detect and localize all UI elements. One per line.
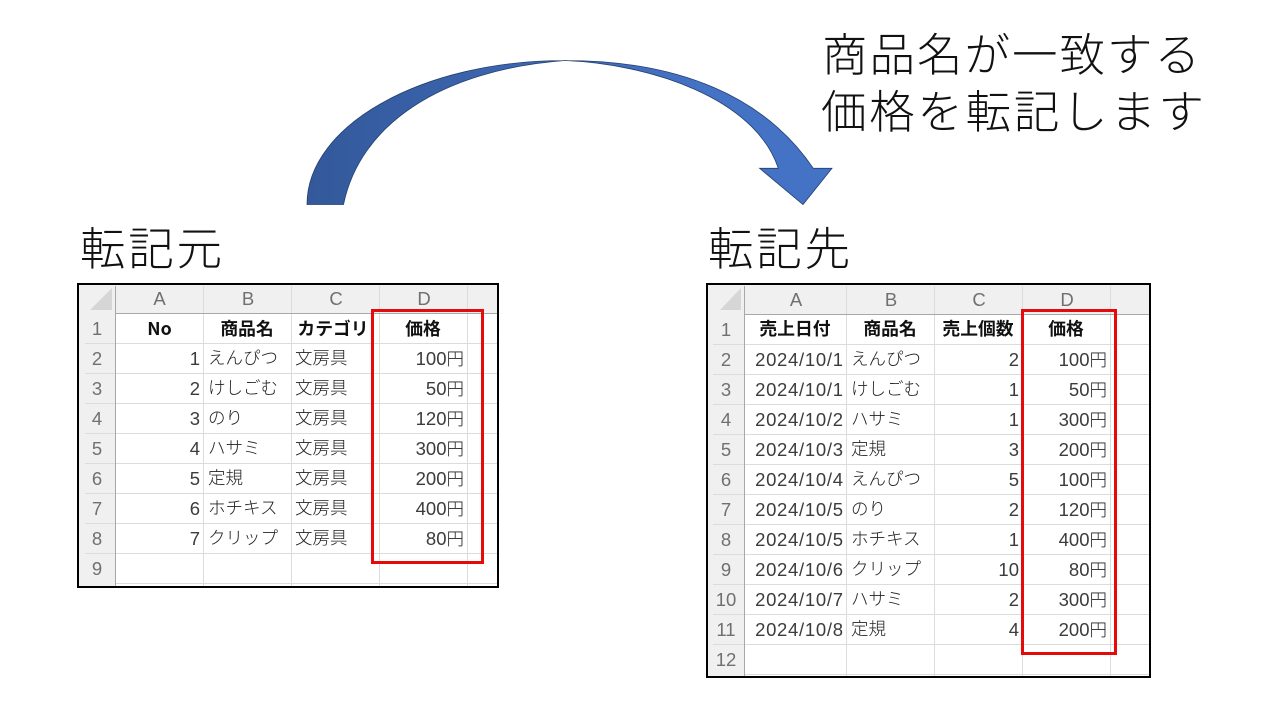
- heading: destination table: 転記先: [708, 213, 850, 279]
- panel: destination spreadsheet: [707, 284, 1150, 677]
- data: sale dates: 2024/10/6: [755, 559, 844, 580]
- heading: source table: 転記元: [80, 213, 222, 279]
- callout heading: 商品名が一致する: [822, 19, 1200, 85]
- data: sale dates: 2024/10/8: [755, 619, 844, 640]
- data: sale dates: 2024/10/1: [755, 379, 844, 400]
- data: prices: 120円: [1059, 497, 1107, 522]
- header row: 商品名: [863, 315, 917, 341]
- data: product names: ホチキス: [208, 495, 277, 520]
- row numbers: 5: [92, 438, 102, 459]
- header row: 価格: [405, 315, 441, 341]
- data: prices: 100円: [1059, 347, 1107, 372]
- data: categories: 文房具: [295, 375, 348, 400]
- row numbers: 9: [721, 559, 731, 580]
- data: product names: けしごむ: [208, 375, 278, 400]
- highlight: price column: [372, 310, 482, 562]
- data: sale dates: 2024/10/7: [755, 589, 844, 610]
- header row: 商品名: [220, 315, 274, 341]
- data: quantities: 1: [1009, 529, 1019, 550]
- data: quantities: 1: [1009, 409, 1019, 430]
- data: quantities: 1: [1009, 379, 1019, 400]
- data: No column: 2: [190, 378, 200, 399]
- data: No column: 6: [190, 498, 200, 519]
- data: prices: 200円: [1059, 617, 1107, 642]
- data: No column: 7: [190, 528, 200, 549]
- row numbers: 12: [716, 649, 736, 670]
- row numbers: 11: [716, 619, 736, 640]
- data: No column: 4: [190, 438, 200, 459]
- callout heading: 価格を転記します: [821, 76, 1204, 142]
- data: sale dates: [755, 349, 844, 640]
- data: quantities: 2: [1009, 349, 1019, 370]
- row numbers: 2: [92, 348, 102, 369]
- data: quantities: 4: [1009, 619, 1019, 640]
- column letters: B: [885, 289, 897, 310]
- header row: No: [147, 315, 172, 341]
- row numbers: 2: [721, 349, 731, 370]
- row numbers: 8: [721, 529, 731, 550]
- data: product names: 定規: [851, 436, 886, 461]
- header row: [147, 315, 441, 341]
- row numbers: 3: [92, 378, 102, 399]
- data: quantities: 10: [998, 559, 1019, 580]
- data: sale dates: 2024/10/5: [755, 499, 844, 520]
- data: prices: [1059, 347, 1107, 642]
- column letters: D: [1060, 289, 1074, 310]
- data: categories: 文房具: [295, 465, 348, 490]
- row numbers: [716, 319, 736, 670]
- data: No column: 5: [190, 468, 200, 489]
- data: product names: クリップ: [851, 556, 921, 581]
- row numbers: 10: [716, 589, 736, 610]
- arrow: curved from source table to destination table: [307, 60, 832, 204]
- data: product names: 定規: [208, 465, 243, 490]
- data: categories: [295, 345, 348, 550]
- data: prices: 80円: [1069, 557, 1107, 582]
- data: product names: ハサミ: [851, 406, 904, 431]
- data: categories: 文房具: [295, 525, 348, 550]
- data: prices: 200円: [1059, 437, 1107, 462]
- data: No column: [190, 348, 200, 549]
- data: product names: けしごむ: [851, 376, 921, 401]
- row numbers: 3: [721, 379, 731, 400]
- data: quantities: 2: [1009, 499, 1019, 520]
- data: quantities: [998, 349, 1019, 640]
- data: product names: ハサミ: [208, 435, 260, 460]
- data: product names: のり: [851, 496, 886, 521]
- header row: 売上個数: [942, 315, 1014, 341]
- data: categories: 文房具: [295, 405, 348, 430]
- data: product names: [851, 346, 921, 641]
- panel: source spreadsheet: [78, 284, 498, 587]
- data: sale dates: 2024/10/3: [755, 439, 844, 460]
- row numbers: 9: [92, 558, 102, 579]
- data: product names: えんぴつ: [851, 466, 921, 491]
- data: product names: ハサミ: [851, 586, 904, 611]
- row numbers: 6: [721, 469, 731, 490]
- data: prices: 50円: [1069, 377, 1107, 402]
- data: product names: えんぴつ: [208, 345, 278, 370]
- row numbers: 4: [721, 409, 731, 430]
- data: quantities: 3: [1009, 439, 1019, 460]
- data: No column: 3: [190, 408, 200, 429]
- data: product names: 定規: [851, 616, 886, 641]
- header row: 価格: [1048, 315, 1084, 341]
- data: categories: 文房具: [295, 345, 348, 370]
- data: No column: 1: [190, 348, 200, 369]
- column letters: C: [972, 289, 986, 310]
- data: sale dates: 2024/10/1: [755, 349, 844, 370]
- row numbers: 1: [92, 318, 102, 339]
- data: prices: [416, 346, 464, 551]
- callout heading: [821, 19, 1204, 142]
- data: categories: 文房具: [295, 495, 348, 520]
- column letters: [153, 288, 431, 309]
- data: prices: 50円: [426, 376, 464, 401]
- data: prices: 100円: [1059, 467, 1107, 492]
- data: prices: 200円: [416, 466, 464, 491]
- data: sale dates: 2024/10/2: [755, 409, 844, 430]
- header row: カテゴリ: [297, 315, 369, 341]
- data: sale dates: 2024/10/5: [755, 529, 844, 550]
- column letters: B: [242, 288, 254, 309]
- column letters: [790, 289, 1074, 310]
- data: prices: 400円: [1059, 527, 1107, 552]
- row numbers: 8: [92, 528, 102, 549]
- data: product names: [208, 345, 278, 550]
- data: product names: のり: [208, 405, 243, 430]
- row numbers: 7: [92, 498, 102, 519]
- column letters: A: [153, 288, 166, 309]
- data: quantities: 5: [1009, 469, 1019, 490]
- row numbers: 7: [721, 499, 731, 520]
- header row: [759, 315, 1084, 341]
- row numbers: 1: [721, 319, 731, 340]
- row numbers: 4: [92, 408, 102, 429]
- data: quantities: 2: [1009, 589, 1019, 610]
- data: prices: 100円: [416, 346, 464, 371]
- column letters: D: [417, 288, 431, 309]
- data: product names: クリップ: [208, 525, 278, 550]
- row numbers: [92, 318, 102, 579]
- data: prices: 300円: [416, 436, 464, 461]
- data: sale dates: 2024/10/4: [755, 469, 844, 490]
- header row: 売上日付: [759, 315, 831, 341]
- data: prices: 300円: [1059, 587, 1107, 612]
- data: product names: えんぴつ: [851, 346, 921, 371]
- data: product names: ホチキス: [851, 526, 920, 551]
- data: categories: 文房具: [295, 435, 348, 460]
- column letters: A: [790, 289, 803, 310]
- data: prices: 120円: [416, 406, 464, 431]
- row numbers: 6: [92, 468, 102, 489]
- highlight: price column: [1022, 310, 1116, 654]
- data: prices: 300円: [1059, 407, 1107, 432]
- row numbers: 5: [721, 439, 731, 460]
- data: prices: 80円: [426, 526, 464, 551]
- column letters: C: [329, 288, 343, 309]
- data: prices: 400円: [416, 496, 464, 521]
